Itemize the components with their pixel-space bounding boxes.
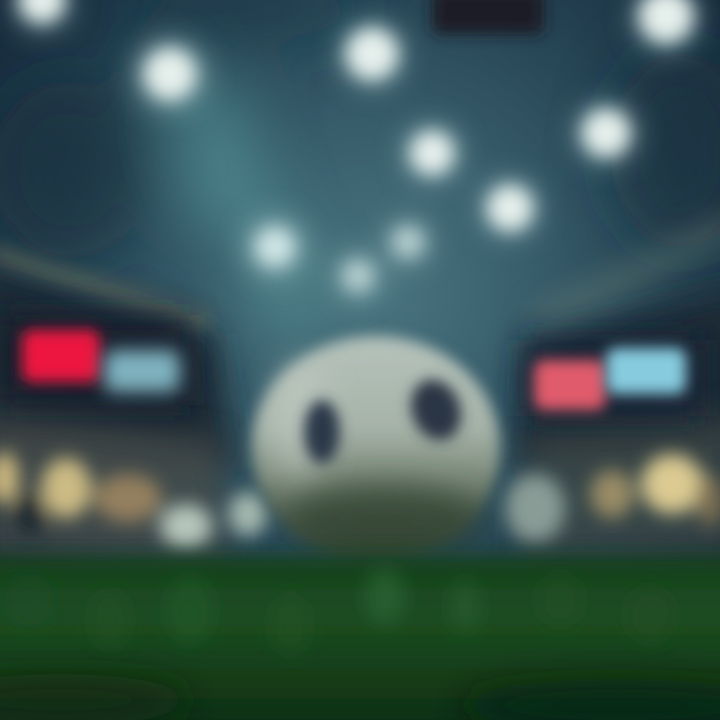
ball patch left: [304, 400, 340, 464]
light beams: [0, 0, 720, 340]
left stand: [0, 252, 268, 560]
left crowd lights: [0, 452, 268, 548]
right scoreboard: [525, 340, 700, 416]
ball patch right: [403, 373, 469, 447]
right stand: [505, 225, 720, 560]
right crowd lights: [505, 454, 720, 542]
football: [252, 336, 500, 560]
left scoreboard: [0, 315, 190, 405]
grass field: [0, 556, 720, 720]
ceiling lights: [16, 0, 696, 296]
dark ceiling fixture: [432, 0, 544, 34]
